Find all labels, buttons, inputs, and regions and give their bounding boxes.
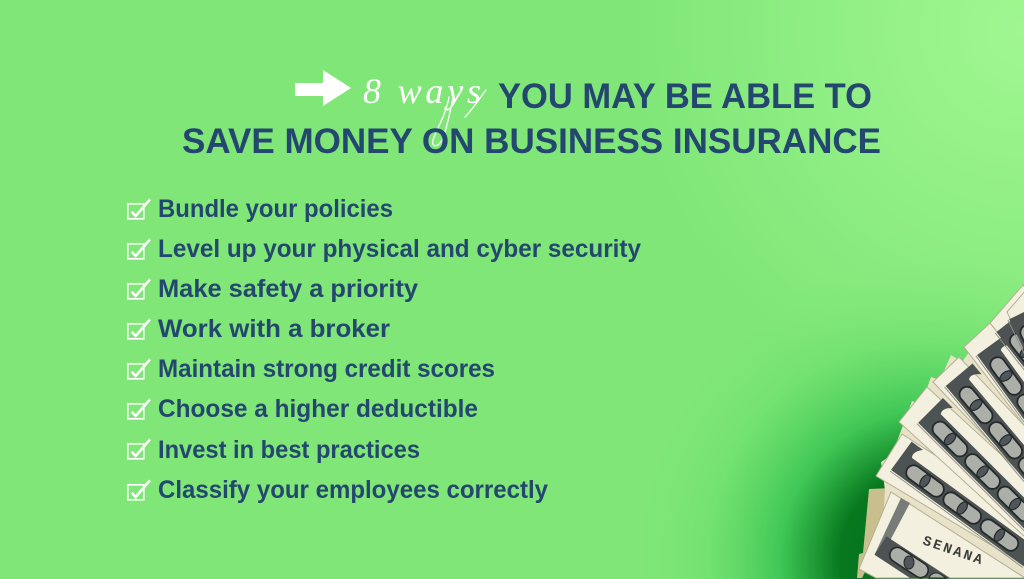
cream filler and tabs behind the fan <box>880 290 1024 578</box>
bill E <box>964 323 1024 490</box>
image: fan of dollar bills <box>857 274 1024 578</box>
bill B <box>876 434 1024 578</box>
item: broker: Work with a broker <box>158 315 390 343</box>
item: credit: Maintain strong credit scores <box>158 355 495 383</box>
bill A with signature: SENANA <box>920 534 985 569</box>
checklist <box>128 195 641 504</box>
script heading: 8 ways: 8 ways <box>363 71 481 111</box>
bill D <box>933 357 1024 518</box>
item: employees: Classify your employees correctly <box>158 476 548 504</box>
icon: white arrow <box>295 70 351 106</box>
bill G <box>1007 274 1024 468</box>
bill A with signature <box>859 492 1024 578</box>
title <box>182 71 881 161</box>
bill C <box>899 387 1024 578</box>
item: safety: Make safety a priority <box>158 275 418 303</box>
item: bundle: Bundle your policies <box>158 195 393 223</box>
script heading: 8 ways <box>363 71 486 146</box>
title line 2: SAVE MONEY ON BUSINESS INSURANCE <box>182 122 881 161</box>
item: security: Level up your physical and cyber security <box>158 235 641 263</box>
title line 1: YOU MAY BE ABLE TO <box>498 77 872 116</box>
bill F <box>990 285 1024 462</box>
item: deductible: Choose a higher deductible <box>158 395 478 423</box>
tan stack edges <box>857 488 900 578</box>
item: best practices: Invest in best practices <box>158 436 420 464</box>
